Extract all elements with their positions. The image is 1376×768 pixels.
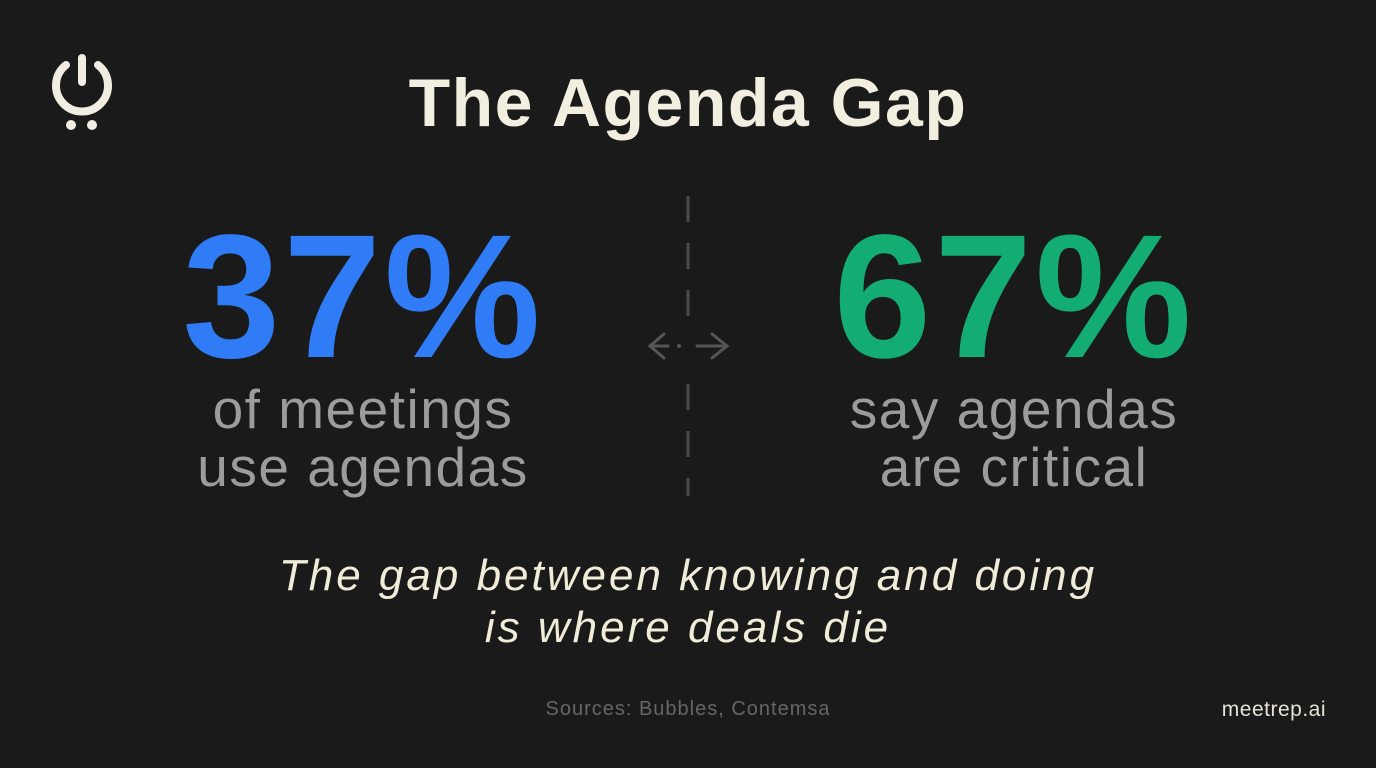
stat right: 67%: 67%: [833, 199, 1195, 395]
stat left: 37%: 37%: [182, 199, 544, 395]
brand: meetrep.ai: [1222, 698, 1326, 721]
sources: Sources: Bubbles, Contemsa: [545, 698, 831, 720]
text: of meetings use agendas: [197, 378, 529, 498]
quote: is where deals die: [485, 603, 891, 652]
text: say agendas are critical: say agendas: [850, 378, 1178, 440]
quote: The gap between knowing and doing: [279, 551, 1097, 600]
text: of meetings use agendas: of meetings: [213, 378, 513, 440]
title: The Agenda Gap: [409, 65, 967, 141]
quote: [279, 551, 1097, 652]
text: say agendas are critical: [850, 378, 1178, 498]
icon: power logo: [52, 54, 112, 130]
divider with arrows: [648, 196, 730, 496]
text: of meetings use agendas: use agendas: [197, 436, 529, 498]
text: say agendas are critical: are critical: [880, 436, 1148, 498]
